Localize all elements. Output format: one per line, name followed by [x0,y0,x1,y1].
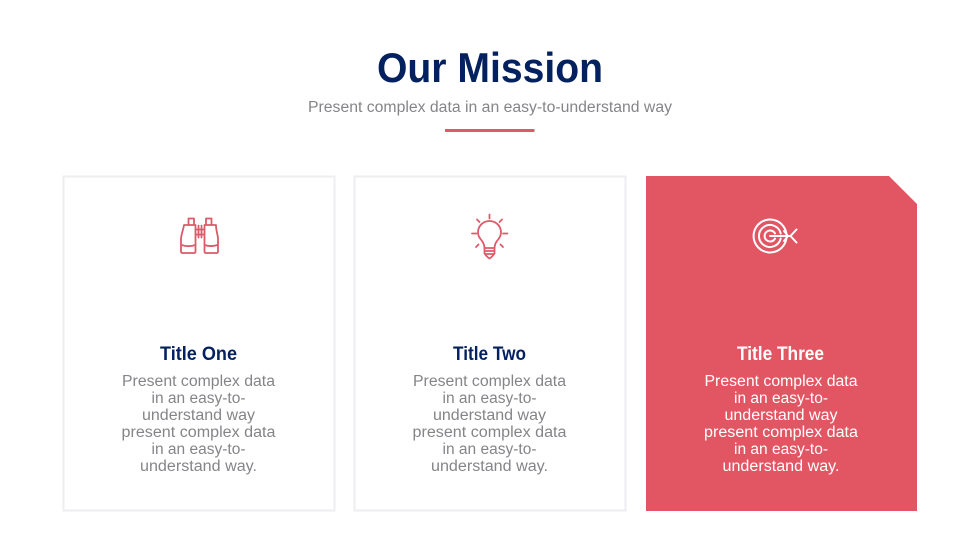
card one body text: understand way. [140,458,257,475]
card one body text [122,373,276,475]
icon: target with arrow [754,220,796,253]
title: Our Mission [377,44,603,91]
card three body text: understand way [724,407,838,424]
card two body text: Present complex data [413,373,566,390]
card one body text: present complex data [122,424,276,441]
card one heading: Title One [160,344,237,365]
icon: binoculars [181,218,218,253]
icon: light bulb [472,214,508,258]
subtitle: Present complex data in an easy-to-understand way [308,99,672,116]
title underline [445,129,534,132]
card one body text: in an easy-to- [152,390,246,407]
card two heading: Title Two [453,344,526,365]
card one body text: in an easy-to- [152,441,246,458]
card three body text [704,373,858,475]
panel: card two [354,176,626,510]
card two body text [412,373,567,475]
card three body text: Present complex data [704,373,858,390]
card two body text: in an easy-to- [442,390,536,407]
card three body text: in an easy-to- [734,390,828,407]
card three body text: in an easy-to- [734,441,828,458]
panel: card three [646,176,917,511]
card two body text: understand way [433,407,546,424]
card one body text: understand way [142,407,255,424]
card three heading: Title Three [737,344,824,365]
card two body text: understand way. [431,458,548,475]
card two body text: present complex data [412,424,567,441]
card three body text: understand way. [722,458,840,475]
card one body text: Present complex data [122,373,275,390]
panel: card one [64,176,334,510]
card two body text: in an easy-to- [442,441,536,458]
card three body text: present complex data [704,424,858,441]
